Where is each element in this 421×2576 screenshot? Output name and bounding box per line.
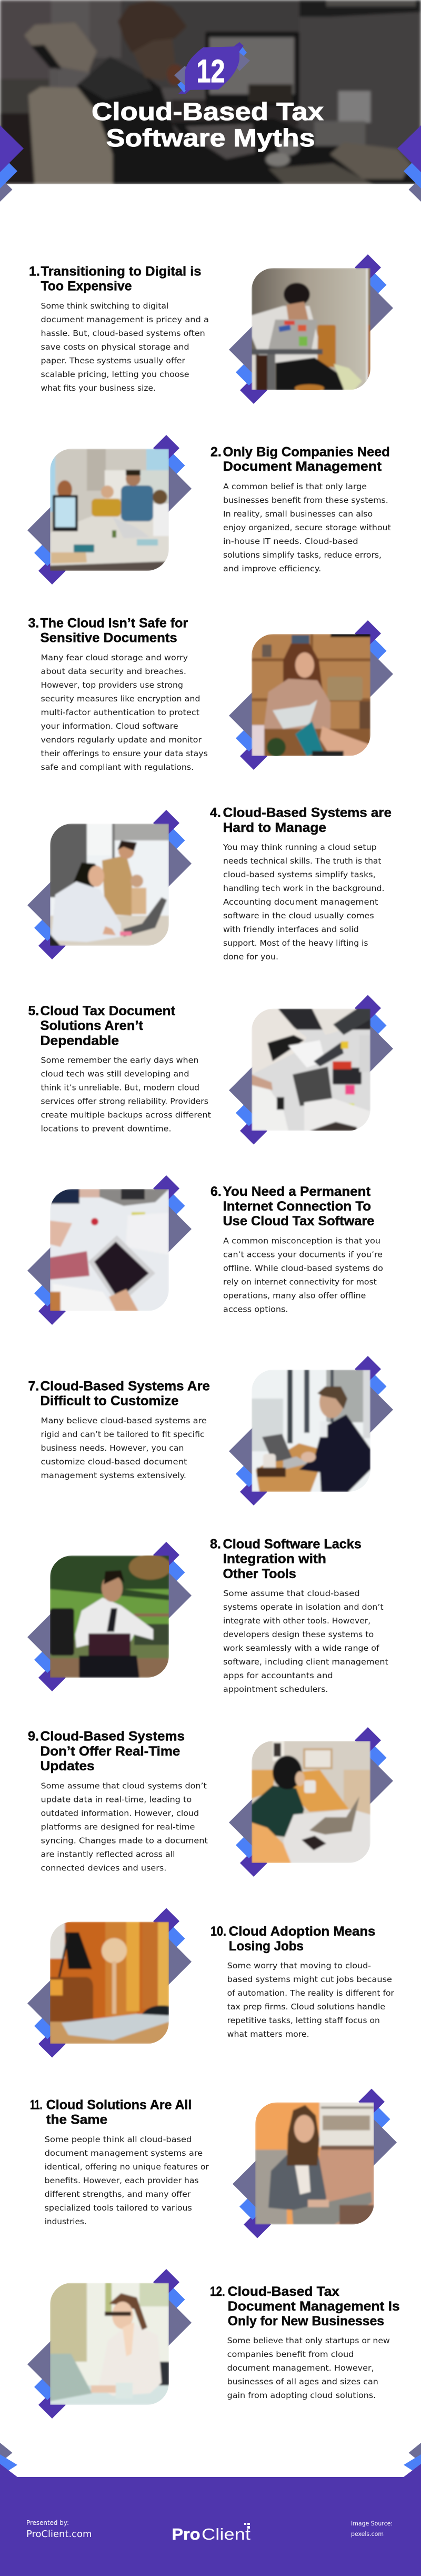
myth 1 body text: what fits your business size. <box>41 383 156 393</box>
myth 4 <box>27 806 392 962</box>
badge: number 12 <box>174 42 250 94</box>
myth 4 heading: 4. <box>210 806 221 820</box>
myth 9 <box>28 1727 393 1877</box>
myth 4 body text: You may think running a cloud setup <box>223 843 377 852</box>
myth 9 body text: platforms are designed for real-time <box>41 1822 195 1831</box>
myth 7 heading: Cloud-Based Systems Are <box>40 1379 210 1393</box>
myth 11 body text: Some people think all cloud-based <box>45 2135 192 2144</box>
myth 11 heading: Cloud Solutions Are All <box>46 2098 192 2113</box>
myth 2 heading: Only Big Companies Need <box>223 444 390 459</box>
myth 4 heading: Hard to Manage <box>223 820 326 835</box>
myth 3 heading: 3. <box>28 616 39 630</box>
myth 3 body text: multi-factor authentication to protect <box>41 708 199 717</box>
myth 4 body text: needs technical skills. The truth is that <box>223 856 381 866</box>
title: Software Myths <box>106 124 315 152</box>
footer logo: ProClient: Pro <box>172 2525 200 2543</box>
myth 5 heading <box>28 1004 176 1048</box>
myth 7 body text: Many believe cloud-based systems are <box>41 1416 207 1425</box>
myth 7 heading: Difficult to Customize <box>40 1394 178 1409</box>
myth 7 body text: rigid and can’t be tailored to fit specific <box>41 1430 205 1439</box>
myth 5 <box>28 995 393 1145</box>
footer side decoration right <box>404 2443 421 2491</box>
myth 4 body text: Accounting document management <box>223 897 378 907</box>
myth 8 heading <box>210 1537 362 1581</box>
myth 12 heading: Cloud-Based Tax <box>228 2284 339 2299</box>
footer presented by: ProClient.com <box>26 2529 92 2540</box>
myth 5 heading: Solutions Aren’t <box>40 1018 144 1033</box>
myth 3 body text: security measures like encryption and <box>41 694 200 704</box>
myth 6 body text: offline. While cloud-based systems do <box>223 1263 383 1273</box>
myth 4 heading: Cloud-Based Systems are <box>223 806 392 820</box>
footer side decoration left <box>0 2443 17 2491</box>
myth 1 heading: Transitioning to Digital is <box>41 264 201 279</box>
myth 3 heading: The Cloud Isn’t Safe for <box>40 616 188 630</box>
myth 1 body text: hassle. But, cloud-based systems often <box>41 329 205 338</box>
myth 9 heading: Don’t Offer Real-Time <box>40 1744 180 1759</box>
myth 7 photo: man in suit at cafe window <box>229 1356 393 1505</box>
myth 3 body text <box>41 653 208 772</box>
myth 6 body text: A common misconception is that you <box>223 1236 380 1245</box>
hero: dark office photo <box>0 0 421 184</box>
myth 2 body text: enjoy organized, secure storage without <box>223 523 391 532</box>
myth 8 body text: integrate with other tools. However, <box>223 1616 370 1626</box>
myth 3 heading: Sensitive Documents <box>40 631 177 646</box>
myth 11 body text: different strengths, and many offer <box>45 2189 191 2199</box>
myth 10 body text: based systems might cut jobs because <box>227 1975 392 1984</box>
myth 6 body text <box>223 1236 383 1314</box>
myth 11 heading: 11. <box>30 2098 42 2113</box>
myth 6 body text: access options. <box>223 1304 288 1314</box>
footer presented by: Presented by: <box>26 2519 69 2527</box>
myth 11 body text: industries. <box>45 2217 87 2226</box>
myth 6 photo: tablet over paperwork <box>27 1175 192 1325</box>
myth 12 <box>27 2269 400 2419</box>
myth 5 body text: cloud tech was still developing and <box>41 1069 189 1079</box>
myth 8 <box>27 1537 388 1694</box>
myth 8 body text: Some assume that cloud-based <box>223 1589 360 1598</box>
myth 5 body text <box>41 1056 211 1134</box>
myth 12 photo: woman in white at laptop <box>27 2269 192 2419</box>
myth 3 body text: vendors regularly update and monitor <box>41 735 202 745</box>
myth 2 heading <box>210 444 390 474</box>
myth 10 body text: of automation. The reality is different for <box>227 1988 395 1998</box>
myth 6 heading <box>210 1184 374 1228</box>
myth 8 body text: apps for accountants and <box>223 1671 333 1680</box>
myth 3 heading <box>28 616 188 646</box>
myth 11 body text: benefits. However, each provider has <box>45 2176 199 2185</box>
myth 5 body text: services offer strong reliability. Providers <box>41 1097 208 1106</box>
myth 12 heading: Document Management Is <box>228 2299 400 2314</box>
myth 11 heading <box>30 2098 192 2127</box>
myth 10 heading: Cloud Adoption Means <box>229 1924 375 1939</box>
myth 2 body text: In reality, small businesses can also <box>223 509 373 519</box>
myth 7 body text <box>41 1416 207 1480</box>
myth 5 heading: Cloud Tax Document <box>40 1004 176 1018</box>
myth 5 body text: think it’s unreliable. But, modern cloud <box>41 1083 199 1093</box>
myth 7 <box>28 1356 393 1505</box>
myth 9 photo: woman with mug on bed with laptop <box>229 1727 393 1877</box>
footer image source: pexels.com <box>351 2530 384 2538</box>
myth 9 body text: outdated information. However, cloud <box>41 1808 199 1818</box>
hero side decoration left <box>0 125 24 202</box>
myth 9 body text: update data in real-time, leading to <box>41 1795 192 1804</box>
footer band <box>0 2477 421 2576</box>
myth 11 photo: woman in blazer with laptop <box>233 2088 397 2238</box>
footer logo: ProClient <box>172 2523 250 2543</box>
myth 9 body text: connected devices and users. <box>41 1863 166 1872</box>
myth 2 photo: office team <box>27 435 192 584</box>
myth 2 <box>27 435 391 584</box>
myth 8 heading: Integration with <box>223 1552 326 1567</box>
myth 1 heading <box>29 264 201 294</box>
myth 4 body text: with friendly interfaces and solid <box>223 925 359 934</box>
myth 6 heading: You Need a Permanent <box>223 1184 371 1199</box>
myth 8 body text: developers design these systems to <box>223 1630 374 1639</box>
myth 4 photo: three colleagues at laptops <box>27 810 192 959</box>
myth 10 heading: Losing Jobs <box>229 1939 304 1954</box>
myth 8 body text: appointment schedulers. <box>223 1685 328 1694</box>
myth 8 photo: man on park bench with laptop <box>27 1542 192 1691</box>
myth 1 <box>29 254 393 404</box>
myth 12 body text <box>227 2336 390 2400</box>
myth 10 body text: Some worry that moving to cloud- <box>227 1961 371 1970</box>
myth 8 heading: Other Tools <box>223 1567 296 1581</box>
footer image source: Image Source: <box>351 2520 393 2527</box>
myth 3 body text: safe and compliant with regulations. <box>41 762 194 772</box>
myth 4 body text: software in the cloud usually comes <box>223 911 374 920</box>
myth 3 body text: their offerings to ensure your data stays <box>41 749 208 758</box>
title: Cloud-Based Tax <box>92 97 324 125</box>
myth 7 body text: business needs. However, you can <box>41 1443 184 1453</box>
footer image source <box>351 2520 393 2538</box>
myth 6 body text: rely on internet connectivity for most <box>223 1277 377 1286</box>
myth 6 body text: operations, many also offer offline <box>223 1291 366 1300</box>
myth 2 body text: solutions simplify tasks, reduce errors, <box>223 550 382 560</box>
myth 1 body text: Some think switching to digital <box>41 301 168 311</box>
myth 9 body text <box>41 1781 208 1872</box>
myth 3 body text: However, top providers use strong <box>41 680 183 690</box>
myth 5 body text: locations to prevent downtime. <box>41 1124 172 1134</box>
myth 2 heading: Document Management <box>223 459 382 474</box>
myth 6 heading: Internet Connection To <box>223 1199 371 1214</box>
myth 12 heading: 12. <box>210 2284 225 2299</box>
myth 4 body text: done for you. <box>223 952 278 962</box>
myth 7 body text: customize cloud-based document <box>41 1457 187 1467</box>
myth 9 body text: Some assume that cloud systems don’t <box>41 1781 207 1790</box>
myth 5 heading: Dependable <box>40 1033 119 1048</box>
myth 4 body text <box>223 843 385 962</box>
myth 5 body text: create multiple backups across different <box>41 1111 211 1120</box>
myth 10 body text <box>227 1961 395 2039</box>
myth 4 body text: support. Most of the heavy lifting is <box>223 938 368 948</box>
myth 12 body text: document management. However, <box>227 2363 374 2373</box>
myth 6 heading: 6. <box>210 1184 222 1199</box>
myth 8 heading: 8. <box>210 1537 221 1551</box>
myth 8 body text: work seamlessly with a wide range of <box>223 1643 379 1653</box>
myth 2 body text: in-house IT needs. Cloud-based <box>223 537 358 546</box>
myth 10 body text: tax prep firms. Cloud solutions handle <box>227 2002 385 2012</box>
myth 11 <box>30 2088 397 2238</box>
myth 1 heading: Too Expensive <box>41 279 132 294</box>
myth 12 heading: Only for New Businesses <box>228 2314 384 2329</box>
footer presented by <box>26 2519 92 2540</box>
myth 9 heading: 9. <box>28 1729 39 1744</box>
title <box>92 97 324 152</box>
myth 3 body text: Many fear cloud storage and worry <box>41 653 188 662</box>
myth 10 photo: desk lamp and keyboard <box>27 1908 192 2058</box>
myth 4 heading <box>210 806 392 835</box>
myth 12 body text: businesses of all ages and sizes can <box>227 2377 378 2386</box>
myth 12 body text: gain from adopting cloud solutions. <box>227 2391 376 2400</box>
myth 7 body text: management systems extensively. <box>41 1471 186 1480</box>
myth 9 heading <box>28 1729 185 1774</box>
myth 9 body text: are instantly reflected across all <box>41 1849 175 1859</box>
myth 8 body text <box>223 1589 388 1694</box>
myth 10 body text: repetitive tasks, letting staff focus on <box>227 2016 380 2025</box>
myth 3 <box>28 616 393 772</box>
myth 11 body text <box>45 2135 209 2226</box>
myth 10 <box>27 1908 395 2058</box>
myth 11 body text: specialized tools tailored to various <box>45 2203 192 2213</box>
myth 11 body text: document management systems are <box>45 2148 203 2158</box>
myth 2 body text: businesses benefit from these systems. <box>223 496 388 505</box>
myth 1 body text: document management is pricey and a <box>41 315 209 324</box>
myth 9 body text: syncing. Changes made to a document <box>41 1836 208 1845</box>
myth 1 body text: paper. These systems usually offer <box>41 356 186 365</box>
myth 4 body text: cloud-based systems simplify tasks, <box>223 870 376 879</box>
badge: number 12: 12 <box>197 53 225 89</box>
footer logo: ProClient: Client <box>202 2525 250 2543</box>
myth 2 body text: A common belief is that only large <box>223 482 367 491</box>
myth 12 body text: companies benefit from cloud <box>227 2350 354 2359</box>
myth 9 heading: Updates <box>40 1759 95 1774</box>
myth 10 heading <box>210 1924 375 1954</box>
myth 3 body text: your information. Cloud software <box>41 721 178 731</box>
myth 1 body text <box>41 301 209 393</box>
myth 5 heading: 5. <box>28 1004 39 1018</box>
myth 6 body text: can’t access your documents if you’re <box>223 1250 383 1259</box>
myth 1 heading: 1. <box>29 264 40 279</box>
myth 10 body text: what matters more. <box>227 2029 309 2039</box>
hero side decoration right <box>397 125 421 202</box>
myth 6 heading: Use Cloud Tax Software <box>223 1214 374 1228</box>
myth 1 body text: save costs on physical storage and <box>41 342 189 352</box>
myth 8 heading: Cloud Software Lacks <box>223 1537 362 1551</box>
myth 3 photo: woman with papers at wooden shelves <box>229 620 393 770</box>
myth 1 photo: stressed man with laptop <box>229 254 393 404</box>
myth 8 body text: systems operate in isolation and don’t <box>223 1602 384 1612</box>
myth 4 body text: handling tech work in the background. <box>223 884 385 893</box>
myth 10 heading: 10. <box>210 1924 226 1939</box>
myth 12 body text: Some believe that only startups or new <box>227 2336 390 2345</box>
myth 2 body text: and improve efficiency. <box>223 564 321 573</box>
myth 6 <box>27 1175 383 1325</box>
myth 5 photo: overhead meeting table <box>229 995 393 1145</box>
myth 3 body text: about data security and breaches. <box>41 667 186 676</box>
myth 5 body text: Some remember the early days when <box>41 1056 199 1065</box>
myth 2 body text <box>223 482 391 573</box>
myth 8 body text: software, including client management <box>223 1657 388 1667</box>
myth 7 heading <box>28 1379 210 1409</box>
myth 11 heading: the Same <box>46 2113 107 2127</box>
myth 1 body text: scalable pricing, letting you choose <box>41 370 189 379</box>
myth 7 heading: 7. <box>28 1379 39 1393</box>
myth 9 heading: Cloud-Based Systems <box>40 1729 185 1744</box>
myth 2 heading: 2. <box>210 444 222 459</box>
myth 11 body text: identical, offering no unique features or <box>45 2162 209 2172</box>
myth 12 heading <box>210 2284 400 2329</box>
